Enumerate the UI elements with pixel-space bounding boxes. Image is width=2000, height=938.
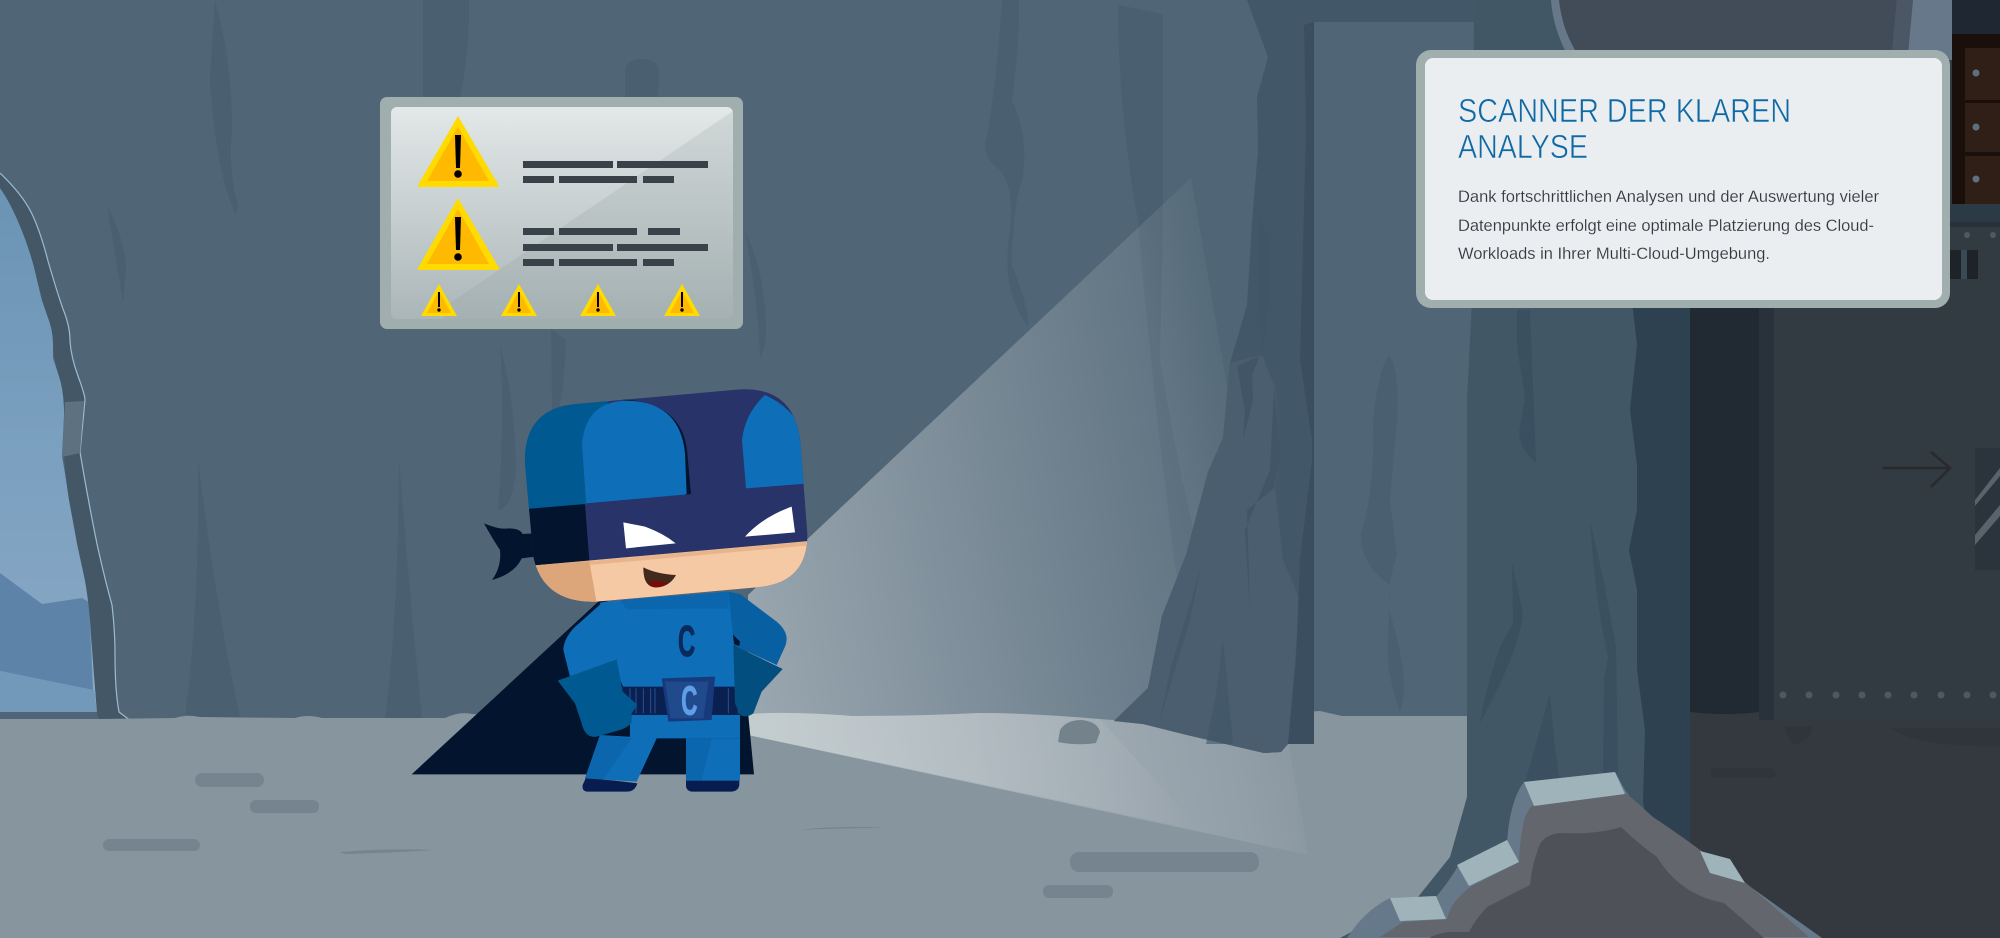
left glove	[558, 659, 637, 737]
chest letter: C	[678, 618, 695, 666]
blue panel right	[742, 395, 810, 488]
eyes	[623, 507, 795, 548]
floor blobs	[103, 773, 1259, 898]
body text: Datenpunkte erfolgt eine optimale Platzierung des Cloud-	[1458, 217, 1874, 235]
distant mountains	[0, 573, 93, 690]
light beam	[748, 178, 1308, 855]
torso	[600, 592, 740, 738]
dark crease	[620, 399, 691, 495]
right door machine	[1551, 0, 2000, 938]
left arm	[563, 602, 627, 677]
left cave opening	[0, 173, 131, 722]
boots	[583, 778, 739, 792]
outer rock layer	[1347, 772, 1822, 938]
control box	[1950, 250, 1978, 279]
belt letter: C	[681, 677, 697, 723]
right rock column	[1340, 0, 1690, 938]
rock cracks	[1160, 214, 1281, 744]
belt	[622, 677, 743, 723]
dark corner	[1952, 0, 2000, 40]
panel body	[1425, 58, 1942, 300]
lower dark floor	[1690, 710, 2000, 938]
blue panel left	[582, 401, 687, 503]
panel glass	[391, 107, 733, 319]
flared rock base	[1114, 355, 1300, 753]
side of head	[525, 401, 609, 510]
left leg	[585, 735, 657, 782]
panel frame	[380, 97, 743, 329]
rivets	[1780, 692, 1996, 698]
right arm	[728, 592, 787, 665]
hatched square	[1975, 448, 2000, 570]
band side	[527, 504, 589, 567]
dark floor smudges	[1710, 726, 2000, 778]
right leg	[686, 738, 740, 781]
inner rock layer	[1429, 827, 1764, 938]
sky seen through opening	[0, 188, 97, 720]
panel frame	[1416, 50, 1950, 308]
bandana knot	[484, 523, 535, 580]
placeholder text bars	[523, 161, 708, 266]
light stone caps	[1390, 772, 1745, 921]
rock pile	[1347, 772, 1822, 938]
body text: Workloads in Ihrer Multi-Cloud-Umgebung.	[1458, 245, 1770, 263]
mask top	[520, 383, 813, 607]
floor	[0, 711, 1480, 938]
arrow	[1883, 452, 1950, 487]
heading: SCANNER DER KLAREN	[1458, 92, 1791, 129]
wall streaks	[107, 0, 1404, 718]
warning triangle large 1	[418, 116, 499, 187]
brown crate	[1952, 34, 2000, 204]
warning triangles small	[421, 284, 700, 316]
right glove	[733, 645, 783, 716]
mouth	[643, 567, 676, 587]
rim patch	[62, 401, 84, 457]
head	[520, 383, 813, 607]
warning triangle large 2	[418, 198, 499, 270]
foreground slope	[0, 671, 97, 712]
stone	[1058, 720, 1100, 744]
cave rim	[0, 173, 131, 722]
heading: ANALYSE	[1458, 128, 1588, 165]
body text: Dank fortschrittlichen Analysen und der Auswertung vieler	[1458, 188, 1880, 206]
central rock column	[1114, 0, 1474, 753]
dark recess	[1690, 0, 1759, 714]
middle rock layer	[1380, 793, 1809, 937]
skin	[536, 541, 808, 602]
cape	[412, 600, 754, 774]
superhero character	[412, 383, 813, 792]
top arch	[1551, 0, 1955, 60]
info panel	[1416, 50, 1950, 308]
shadow strip	[1288, 22, 1314, 744]
alert panel	[380, 97, 743, 329]
door plate	[1774, 0, 2000, 720]
